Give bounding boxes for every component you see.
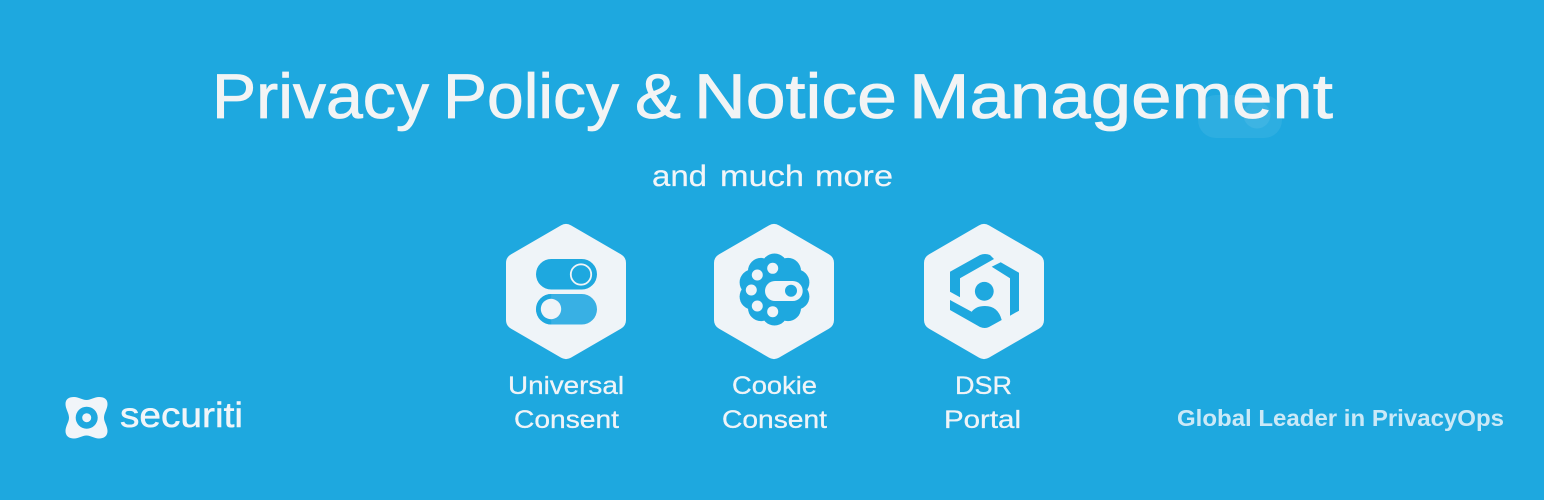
title: Notice — [694, 62, 897, 132]
label: cookie consent: Cookie — [732, 372, 817, 400]
label: dsr portal: DSR — [955, 372, 1012, 400]
title: Privacy — [212, 62, 430, 132]
icon: logo mark — [66, 397, 108, 438]
label: cookie consent: Consent — [722, 406, 827, 434]
title — [212, 62, 1334, 132]
icon: cookie consent — [724, 234, 824, 349]
subtitle: and — [652, 160, 707, 193]
title: Management — [909, 62, 1334, 132]
label: universal consent — [508, 372, 624, 434]
wordmark: securiti — [120, 396, 243, 435]
subtitle — [652, 160, 893, 193]
label: universal consent: Universal — [508, 372, 624, 400]
label: dsr portal — [944, 372, 1021, 434]
icon: dsr portal — [934, 234, 1034, 349]
logo: securiti — [66, 396, 243, 438]
label: dsr portal: Portal — [944, 406, 1021, 434]
icon: universal consent — [516, 234, 616, 349]
subtitle: much — [720, 160, 804, 193]
ghost toggle behind title — [1198, 95, 1282, 138]
title: & — [635, 62, 681, 132]
label: cookie consent — [722, 372, 827, 434]
subtitle: more — [815, 160, 893, 193]
tagline: Global Leader in PrivacyOps — [1177, 405, 1504, 431]
title: Policy — [443, 62, 620, 132]
label: universal consent: Consent — [514, 406, 619, 434]
